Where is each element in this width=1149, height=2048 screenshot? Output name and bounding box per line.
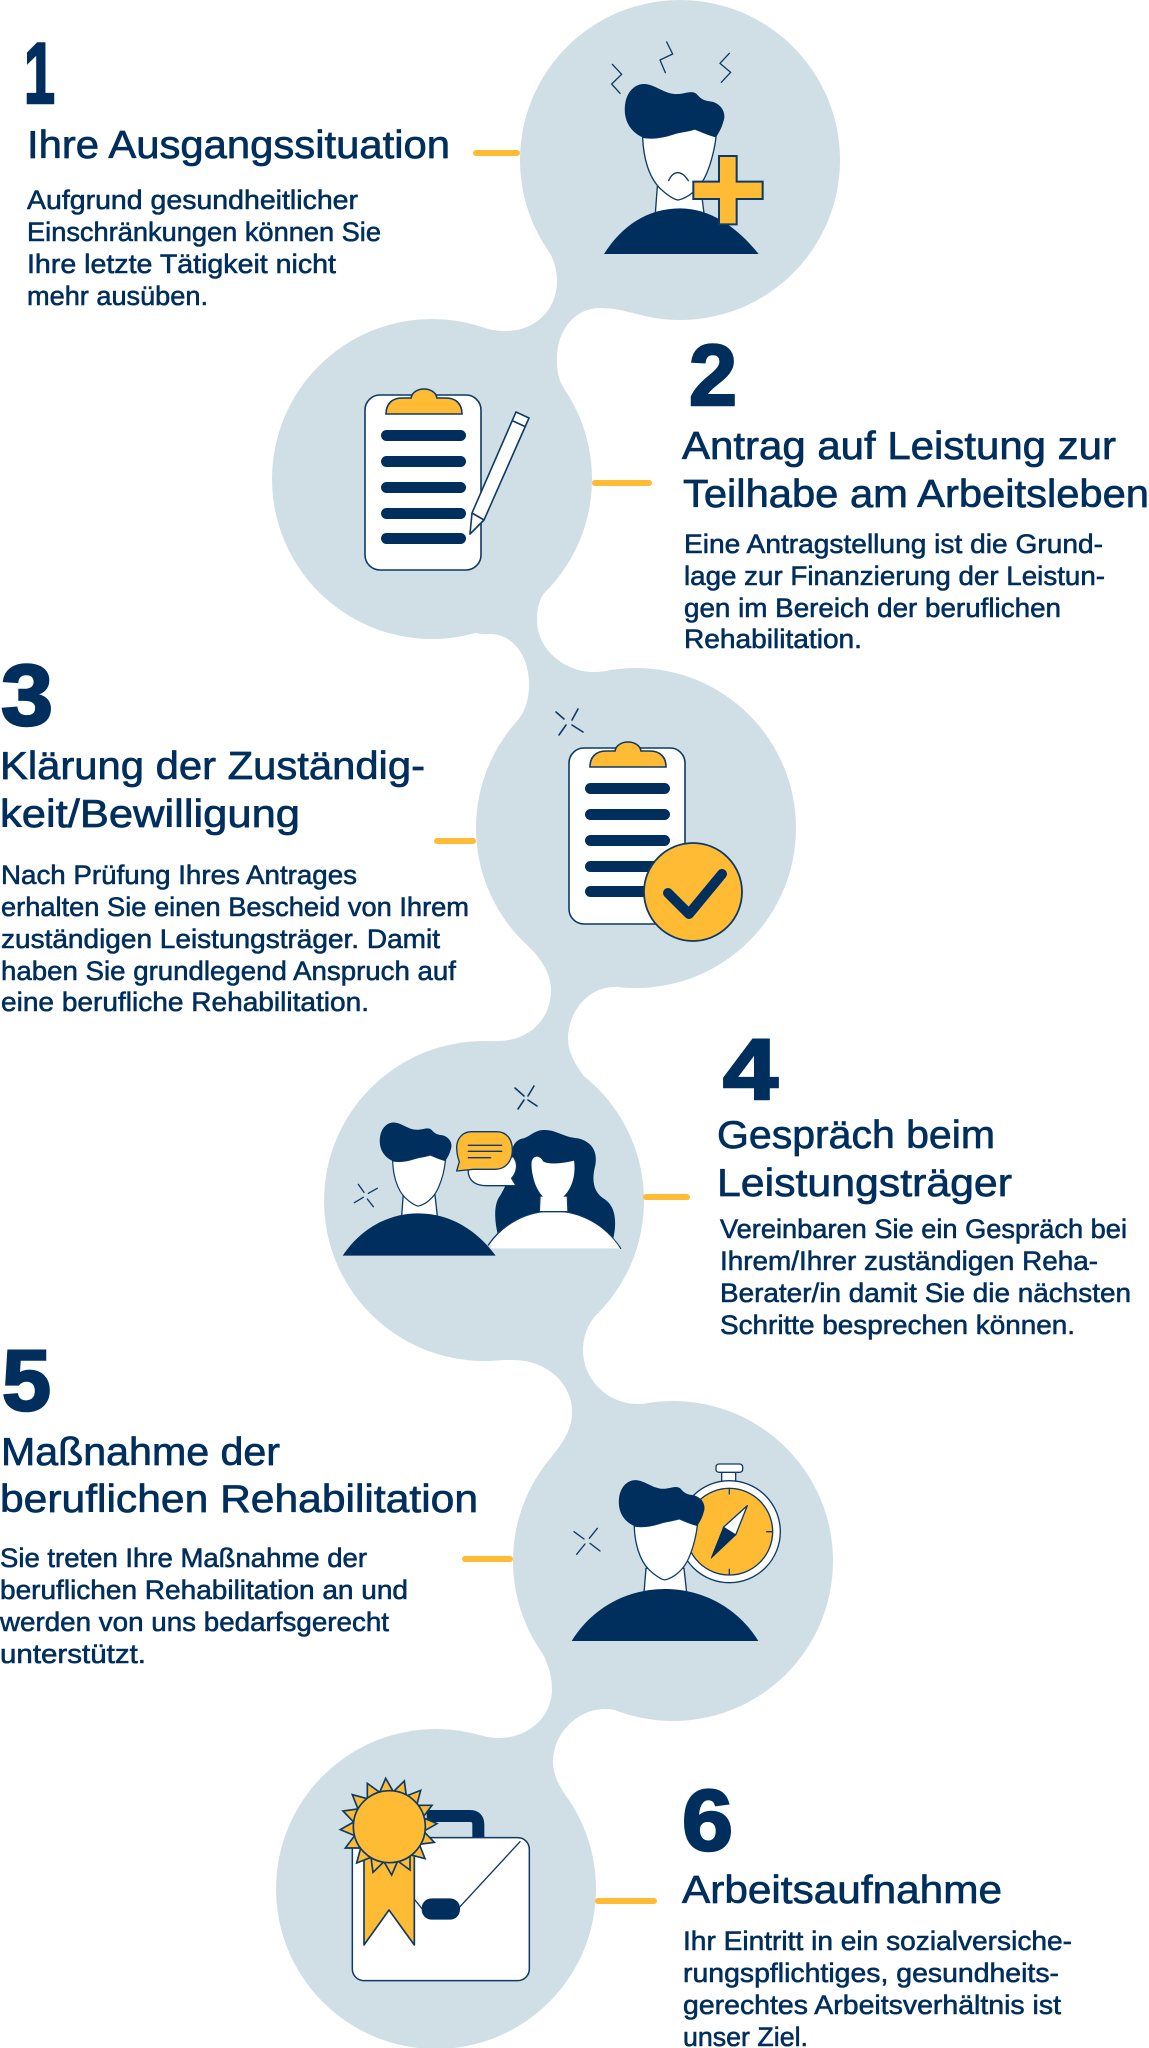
heading 5: beruflichen Rehabilitation [0, 1478, 478, 1521]
body text 1 [27, 185, 381, 311]
step 1 [24, 26, 763, 311]
icon: white speech bubble [468, 1157, 517, 1186]
body text 2 [684, 529, 1105, 654]
heading 2 [682, 425, 1149, 516]
body text 5: Sie treten Ihre Maßnahme der [0, 1543, 367, 1573]
heading 1: Ihre Ausgangssituation [27, 124, 450, 167]
connector dash 3 [434, 838, 476, 844]
body text 2: gen im Bereich der beruflichen [684, 593, 1061, 623]
number 1: 1 [24, 26, 55, 122]
body text 3: eine berufliche Rehabilitation. [1, 987, 369, 1017]
icon: stressed person with medical cross [604, 42, 763, 254]
step 2 [365, 328, 1149, 654]
connector dash 1 [473, 150, 520, 156]
icon: yellow speech bubble [457, 1132, 512, 1171]
number 6: 6 [682, 1773, 733, 1869]
body text 5: werden von uns bedarfsgerecht [0, 1607, 389, 1637]
heading 4: Leistungsträger [717, 1162, 1012, 1205]
icon: briefcase with award rosette [340, 1778, 529, 1981]
body text 2: Eine Antragstellung ist die Grund- [684, 529, 1103, 559]
body text 6 [683, 1926, 1072, 2048]
heading 2: Teilhabe am Arbeitsleben [683, 473, 1149, 516]
heading 5 [0, 1431, 478, 1521]
number 2: 2 [689, 328, 737, 424]
heading 4: Gespräch beim [717, 1114, 995, 1157]
heading 6: Arbeitsaufnahme [682, 1869, 1002, 1912]
body text 5: unterstützt. [0, 1639, 146, 1669]
body text 4: Berater/in damit Sie die nächsten [720, 1278, 1131, 1308]
blob path: six circles joined by connectors [272, 0, 840, 2048]
body text 4 [720, 1214, 1131, 1340]
body text 2: lage zur Finanzierung der Leistun- [684, 561, 1105, 591]
icon: clipboard with check mark [569, 742, 742, 941]
body text 4: Ihrem/Ihrer zuständigen Reha- [720, 1246, 1098, 1276]
connector dash 4 [643, 1194, 690, 1200]
body text 2: Rehabilitation. [684, 624, 862, 654]
number 3: 3 [1, 648, 53, 744]
body text 1: Ihre letzte Tätigkeit nicht [27, 249, 337, 279]
heading 3: keit/Bewilligung [0, 793, 300, 836]
connector dash 2 [592, 480, 652, 486]
heading 3 [0, 745, 425, 836]
icon: clipboard with pencil [365, 389, 529, 570]
icon: sparkle [556, 709, 583, 735]
step 3 [0, 648, 742, 1017]
body text 3: haben Sie grundlegend Anspruch auf [1, 956, 457, 986]
icon: person with compass stopwatch [572, 1464, 780, 1641]
number 4: 4 [723, 1022, 778, 1118]
body text 1: mehr ausüben. [27, 281, 208, 311]
body text 3: zuständigen Leistungsträger. Damit [1, 924, 441, 954]
body text 6: rungspflichtiges, gesundheits- [683, 1958, 1059, 1988]
body text 5: beruflichen Rehabilitation an und [0, 1575, 408, 1605]
heading 5: Maßnahme der [1, 1431, 280, 1474]
body text 1: Aufgrund gesundheitlicher [27, 185, 358, 215]
connector dash 5 [462, 1556, 513, 1562]
icon: sparkle [515, 1086, 537, 1109]
body text 3: Nach Prüfung Ihres Antrages [1, 860, 357, 890]
heading 2: Antrag auf Leistung zur [682, 425, 1116, 468]
body text 5 [0, 1543, 408, 1669]
body text 4: Schritte besprechen können. [720, 1310, 1075, 1340]
heading 3: Klärung der Zuständig- [0, 745, 425, 788]
step 6 [340, 1773, 1072, 2048]
connector dash 6 [595, 1898, 657, 1904]
icon: two people in conversation [343, 1123, 621, 1256]
heading 4 [717, 1114, 1012, 1205]
body text 6: Ihr Eintritt in ein sozialversiche- [683, 1926, 1072, 1956]
body text 3 [1, 860, 469, 1017]
body text 3: erhalten Sie einen Bescheid von Ihrem [1, 892, 469, 922]
body text 6: gerechtes Arbeitsverhältnis ist [683, 1990, 1062, 2020]
step 4 [343, 1022, 1131, 1340]
step 5 [0, 1333, 780, 1669]
body text 1: Einschränkungen können Sie [27, 217, 381, 247]
body text 4: Vereinbaren Sie ein Gespräch bei [720, 1214, 1127, 1244]
number 5: 5 [2, 1333, 51, 1429]
